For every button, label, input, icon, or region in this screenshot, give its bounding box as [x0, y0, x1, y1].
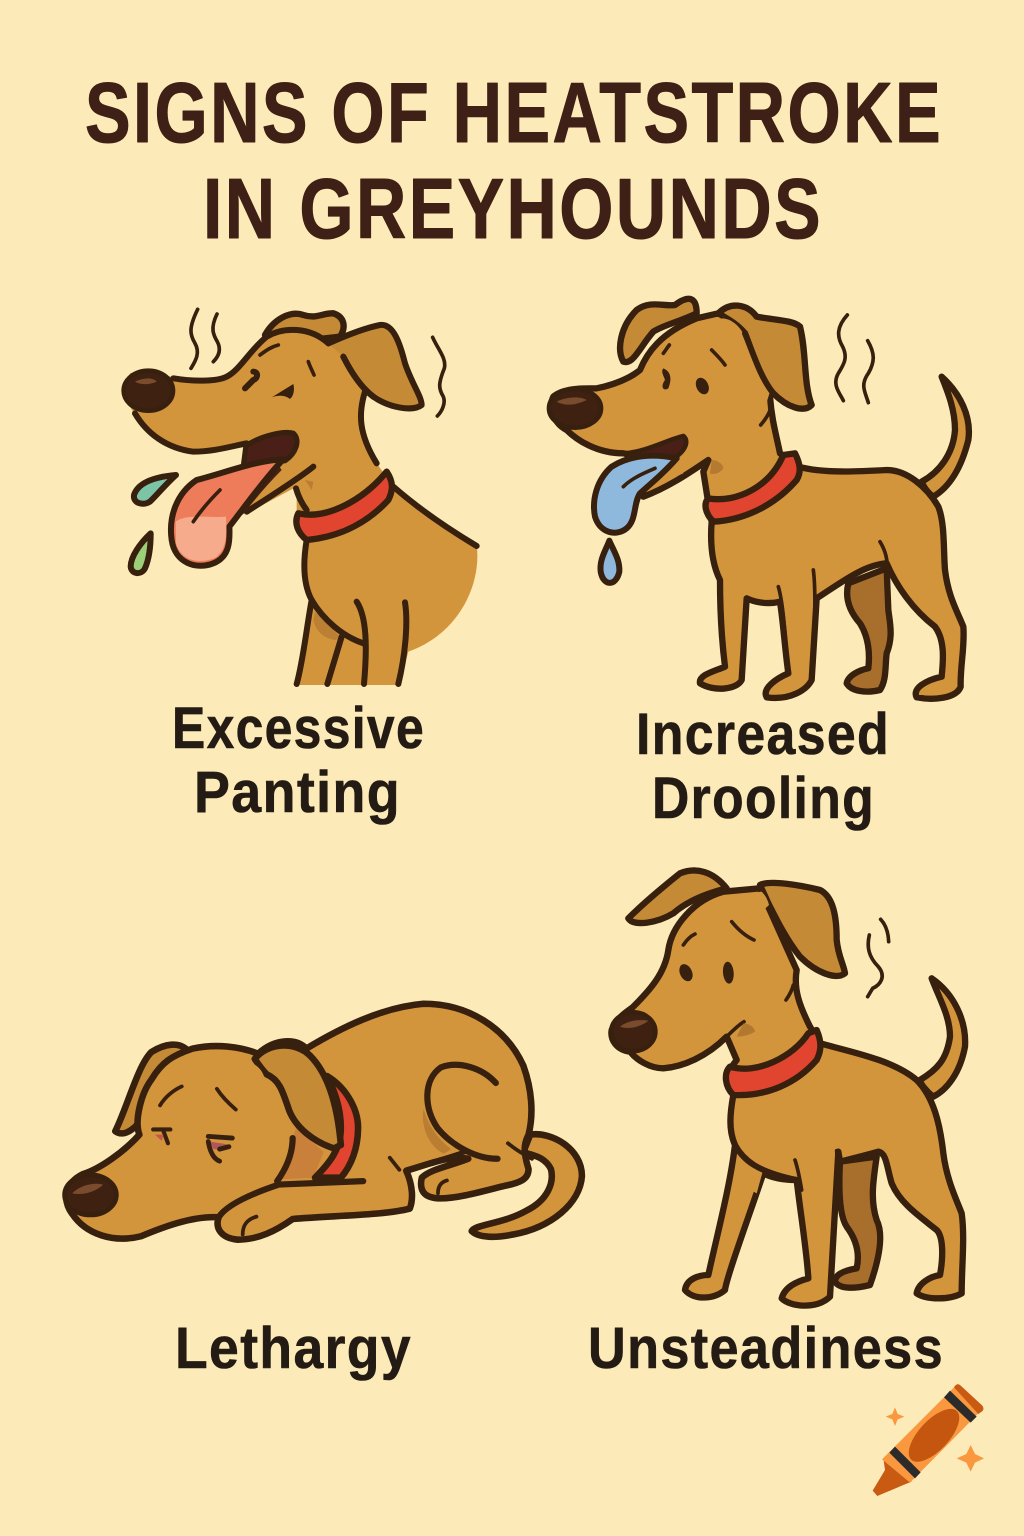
- crayon wrapper: [882, 1384, 983, 1483]
- neck line: [277, 1138, 293, 1181]
- front ear: [718, 306, 812, 409]
- front ear: [328, 325, 422, 408]
- dizzy squiggles: [868, 919, 889, 997]
- mouth shadow: [737, 1023, 755, 1037]
- neck shadow: [305, 480, 313, 490]
- tail: [472, 1134, 582, 1237]
- front ear: [760, 883, 845, 976]
- collar: [315, 1076, 358, 1178]
- nose highlight: [72, 1184, 103, 1194]
- mouth interior: [243, 433, 297, 467]
- crayon end cap: [954, 1384, 983, 1414]
- jaw: [643, 460, 683, 490]
- heat waves: [836, 315, 873, 403]
- face cover at ear root: [244, 1063, 264, 1083]
- eyes and brows: [245, 345, 373, 399]
- illustration: panting dog: [124, 309, 477, 685]
- back ear: [115, 1045, 188, 1133]
- front ear: [255, 1045, 341, 1148]
- paw and haunch lines: [219, 1065, 532, 1235]
- tail: [922, 377, 969, 497]
- illustration: unsteady dog: [611, 870, 965, 1306]
- tongue: [171, 459, 283, 566]
- crayon oval: [900, 1401, 968, 1470]
- mouth interior: [625, 436, 686, 467]
- far hind leg: [835, 1157, 880, 1288]
- label: excessive panting: Excessive: [172, 696, 425, 761]
- panel: unsteadiness: [588, 870, 965, 1381]
- sweat drop: teal: [134, 475, 176, 504]
- panel: increased drooling: [549, 299, 969, 831]
- sweat drop: green: [131, 533, 151, 573]
- back ear: [620, 299, 697, 362]
- drool drop: [600, 541, 619, 583]
- illustration: lying dog: [65, 1004, 582, 1240]
- nose highlight: [557, 397, 587, 405]
- nose highlight: [620, 1020, 648, 1028]
- nose: [611, 1012, 655, 1051]
- dog body and head: [66, 1004, 531, 1240]
- label: unsteadiness: Unsteadiness: [588, 1316, 944, 1381]
- nose highlight: [135, 378, 157, 384]
- far hind leg: [847, 568, 891, 692]
- crayon tip: [873, 1458, 912, 1496]
- label: lethargy: Lethargy: [175, 1316, 412, 1381]
- dog outline strokes: [135, 330, 477, 684]
- ear root cover: [750, 892, 769, 913]
- heat waves: [191, 309, 445, 416]
- label: increased drooling: [636, 702, 890, 831]
- cover for leg joints: [733, 1153, 763, 1193]
- nose: [65, 1175, 116, 1215]
- label: increased drooling: Increased: [636, 702, 890, 767]
- panel: lethargy: [65, 1004, 582, 1381]
- icon: crayon with sparkles: [873, 1384, 984, 1496]
- crayon bands: [889, 1391, 977, 1478]
- collar: [726, 1030, 820, 1095]
- collar: [296, 472, 392, 540]
- tongue crease: [623, 468, 655, 487]
- label: increased drooling: Drooling: [652, 766, 875, 831]
- label: excessive panting: Panting: [194, 760, 401, 825]
- ear crease and neck line: [745, 333, 887, 678]
- dog body and head: [611, 888, 963, 1306]
- haunch shadow: [423, 1109, 451, 1154]
- back ear: [628, 870, 727, 923]
- sparkle: large: [957, 1445, 984, 1472]
- nose: [549, 389, 601, 428]
- tongue highlight: [176, 517, 226, 561]
- label: excessive panting: [172, 696, 425, 825]
- tongue crease: [193, 490, 220, 522]
- dog body fill: [126, 330, 477, 685]
- eyes and brows: [662, 345, 725, 396]
- title: [85, 66, 943, 257]
- neck patch: [279, 1128, 324, 1179]
- body lines: [727, 985, 837, 1190]
- tongue: [594, 456, 677, 533]
- neck shadow: [710, 460, 723, 474]
- eyes and brows: [677, 922, 754, 984]
- title: IN GREYHOUNDS: [203, 162, 823, 257]
- illustration: drooling dog: [549, 299, 969, 699]
- tail: [920, 978, 965, 1097]
- shoulder shadow: [313, 612, 342, 640]
- panel: excessive panting: [124, 309, 477, 825]
- eyes and brows: [153, 1086, 236, 1161]
- ear outline: [328, 325, 422, 408]
- sparkle: small: [886, 1407, 904, 1426]
- under-tongue shadow: [228, 465, 282, 524]
- back ear: [265, 313, 344, 340]
- collar: [706, 453, 800, 522]
- nose: [124, 371, 173, 411]
- dog body and head: [551, 313, 964, 699]
- ear inner cover: [707, 318, 770, 423]
